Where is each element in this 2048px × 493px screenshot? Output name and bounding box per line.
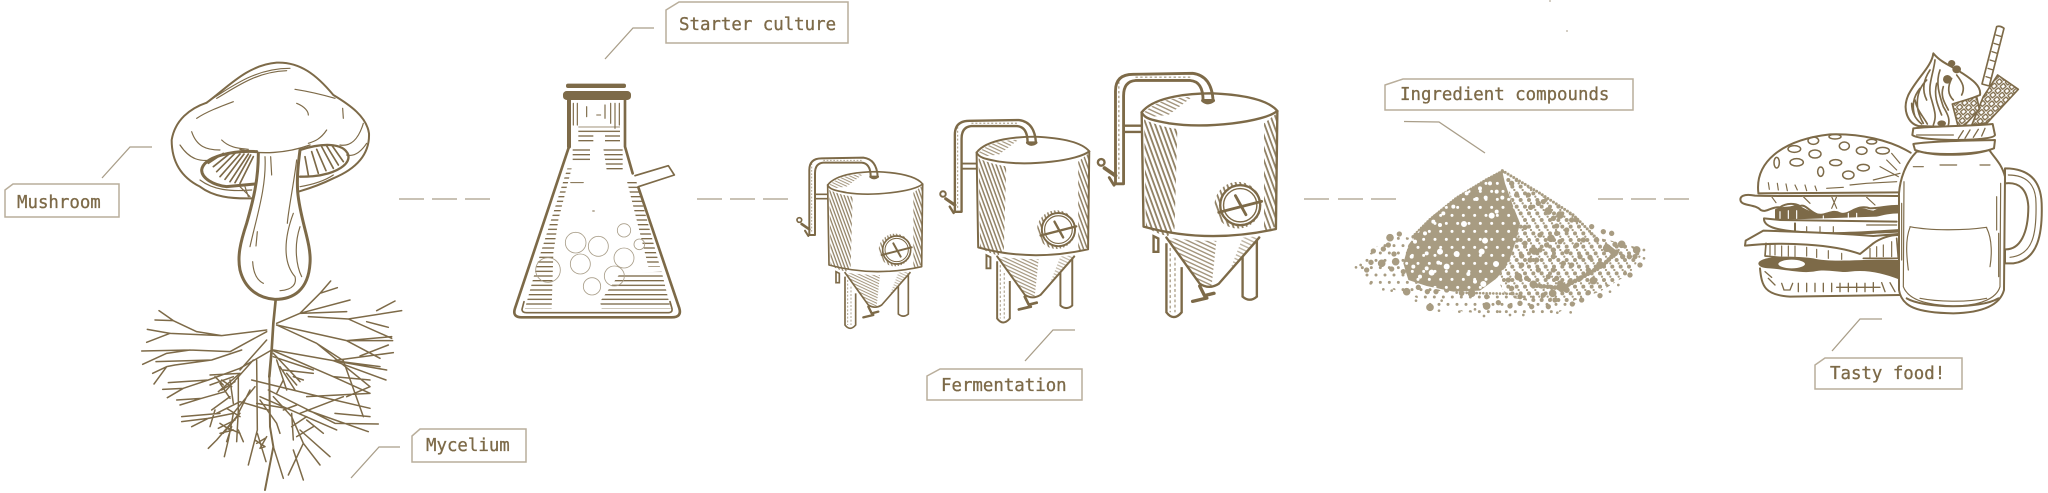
icon: pile of powder — [1353, 171, 1650, 316]
icon: waffles — [1972, 75, 2018, 125]
icon: milkshake jar — [1899, 26, 2042, 313]
label: Fermentation: Fermentation — [941, 376, 1067, 396]
specks — [1550, 0, 1567, 32]
icon: flask with bubbles — [514, 84, 680, 317]
label: Starter culture: Starter culture — [679, 15, 836, 35]
icon: medium tank — [940, 120, 1089, 322]
label: Fermentation — [927, 330, 1082, 400]
icon: jar neck — [1912, 124, 1995, 140]
connector: mushroom to flask — [399, 198, 490, 200]
label: Mycelium — [351, 429, 526, 478]
label: Tasty food! — [1815, 319, 1962, 389]
connector: powder to food — [1598, 198, 1689, 200]
icon: mushroom — [172, 63, 369, 299]
icon: large tank — [1098, 73, 1277, 317]
icon: small tank — [797, 158, 923, 328]
label: Starter culture — [605, 2, 848, 59]
label: Mushroom — [5, 147, 152, 217]
icon: burger — [1740, 134, 1911, 297]
label: Mushroom: Mushroom — [17, 193, 101, 213]
icon: mycelium roots — [142, 281, 402, 490]
label: Tasty food!: Tasty food! — [1830, 364, 1945, 384]
icon: burger and milkshake jar — [1740, 26, 2042, 313]
label: Ingredient compounds: Ingredient compounds — [1400, 85, 1609, 105]
label: Mycelium: Mycelium — [426, 436, 510, 456]
panel: mushroom and mycelium — [142, 63, 402, 490]
label: Ingredient compounds — [1385, 79, 1633, 153]
connector: flask to tanks — [697, 198, 788, 200]
icon: fermentation tanks — [797, 73, 1277, 328]
icon: waffle straw — [1982, 26, 2004, 86]
connector: tanks to powder — [1304, 198, 1396, 200]
icon: ice cream swirl — [1906, 53, 1980, 127]
